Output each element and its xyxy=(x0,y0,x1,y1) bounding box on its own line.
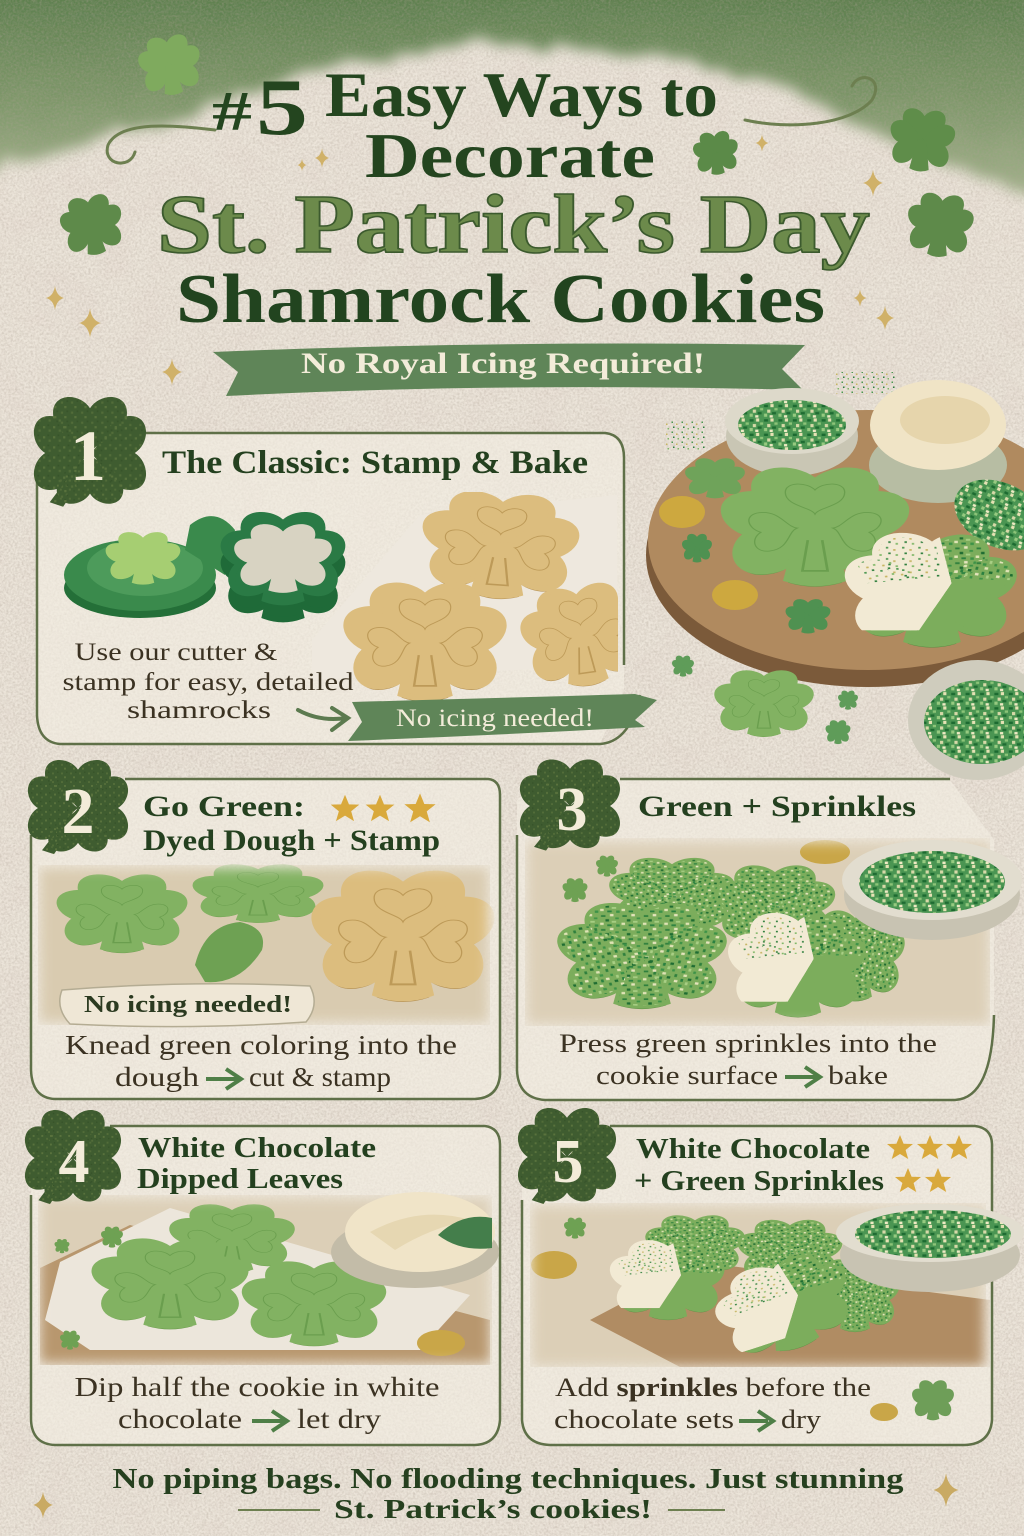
wood board xyxy=(590,1262,990,1367)
title line: Decorate: Decorate xyxy=(365,120,655,191)
number badge 2: 2 xyxy=(62,775,94,848)
no icing label: No icing needed! xyxy=(84,992,292,1018)
panel 3 caption: bake xyxy=(828,1061,888,1090)
panel 5 frame xyxy=(522,1126,992,1445)
panel 2 photo xyxy=(38,865,494,1025)
panel 4 caption xyxy=(74,1372,440,1434)
panel 5 sprinkle bowl xyxy=(836,1204,1024,1292)
stars xyxy=(887,1135,972,1192)
footer text xyxy=(112,1463,904,1524)
white chocolate bowl xyxy=(869,380,1007,503)
three stars xyxy=(331,793,436,822)
footer line one: No piping bags. No flooding techniques. Just stunning xyxy=(112,1463,904,1495)
number badge 1: 1 xyxy=(70,416,106,496)
tan cookies xyxy=(418,490,581,604)
title number five: 5 xyxy=(256,64,308,152)
panel 3 caption: Press green sprinkles into the xyxy=(559,1029,937,1058)
title xyxy=(157,59,870,338)
gold coin xyxy=(800,840,850,864)
panel 5 heading xyxy=(634,1133,884,1197)
gold coin xyxy=(531,1251,577,1279)
small table shamrocks xyxy=(672,656,858,744)
decorative coin and shamrock xyxy=(870,1380,955,1421)
gold coin xyxy=(417,1330,465,1356)
arrow xyxy=(739,1411,773,1431)
panel 2 frame xyxy=(31,779,500,1099)
number badge 4 xyxy=(25,1110,121,1204)
panel 4 heading: Dipped Leaves xyxy=(137,1163,343,1195)
panel 1 ribbon xyxy=(348,694,657,741)
panel 2 fill xyxy=(31,779,500,1099)
panel 2 heading xyxy=(143,790,440,857)
lower sprinkle bowl xyxy=(908,660,1024,780)
hero: wooden board with cookies xyxy=(646,372,1024,780)
wood and parchment xyxy=(40,1225,490,1365)
decorative shamrocks and sparkles in header xyxy=(46,32,977,385)
panel 5: White Chocolate + Green Sprinkles xyxy=(518,1108,1024,1445)
arrow xyxy=(206,1069,241,1089)
panel 1 fill xyxy=(37,433,624,744)
number badge 1 xyxy=(34,397,146,507)
panel 5 heading: White Chocolate xyxy=(636,1133,870,1165)
panel 3 caption: cookie surface xyxy=(596,1061,778,1090)
panel 4: White Chocolate Dipped Leaves xyxy=(25,1110,500,1445)
number badge 3 xyxy=(520,759,620,851)
panel 3 sprinkle bowl xyxy=(842,840,1022,940)
arrow xyxy=(252,1411,287,1431)
green header wash xyxy=(0,0,1024,205)
panel 5 heading: + Green Sprinkles xyxy=(634,1165,884,1197)
panel 2 caption xyxy=(65,1030,457,1092)
panel 5 caption: chocolate sets xyxy=(554,1405,734,1434)
number badge 4: 4 xyxy=(58,1128,90,1196)
parchment xyxy=(312,495,617,680)
wooden board xyxy=(646,410,1024,687)
panel 4 frame xyxy=(31,1126,500,1445)
title line: St. Patrick's Day: St. Patrick’s Day xyxy=(157,178,870,271)
panel 3 frame xyxy=(517,779,994,1100)
panel 5 caption: dry xyxy=(781,1405,821,1434)
panel 4 caption: chocolate xyxy=(118,1404,242,1434)
small cookies and coins xyxy=(659,458,831,633)
panel 1: The Classic xyxy=(34,397,657,744)
cutter xyxy=(222,515,344,620)
panel 1 caption: shamrocks xyxy=(127,697,271,724)
sprinkle bowl xyxy=(725,388,859,476)
stamp xyxy=(64,516,235,618)
panel 3 photo xyxy=(525,838,990,1026)
panel 1 frame xyxy=(37,433,640,744)
panel 3 caption xyxy=(559,1029,937,1090)
panel 3: Green + Sprinkles xyxy=(517,759,1022,1100)
panel 5 photo xyxy=(530,1203,990,1369)
footer line two: St. Patrick’s cookies! xyxy=(334,1494,652,1524)
panel 4 caption: let dry xyxy=(297,1404,382,1434)
title hash: # xyxy=(212,81,252,143)
panel 2 caption: cut & stamp xyxy=(249,1062,391,1092)
panel 1 ribbon: No icing needed! xyxy=(396,705,594,732)
number badge 5: 5 xyxy=(552,1128,584,1196)
title line: Shamrock Cookies: Shamrock Cookies xyxy=(176,261,825,338)
arrow xyxy=(785,1067,820,1087)
number badge 5 xyxy=(518,1108,616,1204)
scattered sprinkles on table xyxy=(665,372,895,450)
panel 3 fill xyxy=(517,780,994,1100)
panel 1 caption: stamp for easy, detailed xyxy=(62,669,354,696)
panel 4 heading xyxy=(137,1132,376,1195)
sprinkle spoon xyxy=(943,466,1024,564)
large green cookie xyxy=(721,470,909,587)
arrow xyxy=(298,708,348,730)
number badge 3: 3 xyxy=(556,776,588,844)
panel 4 fill xyxy=(31,1126,500,1445)
panel 4 caption: Dip half the cookie in white xyxy=(74,1372,440,1402)
panel 2 caption: Knead green coloring into the xyxy=(65,1030,457,1060)
panel 1 caption xyxy=(62,639,354,724)
panel 5 caption xyxy=(554,1373,871,1434)
number badge 2 xyxy=(28,760,128,854)
no icing label xyxy=(60,984,314,1027)
panel 5 fill xyxy=(522,1126,992,1445)
white chocolate bowl xyxy=(331,1192,499,1288)
panel 2 heading: Go Green: xyxy=(143,790,305,823)
panel 4 heading: White Chocolate xyxy=(138,1132,376,1164)
subtitle ribbon xyxy=(213,344,805,396)
decorative title flourishes xyxy=(107,78,876,163)
footer sparkles xyxy=(33,1473,959,1518)
cookie on table xyxy=(715,672,813,737)
panel 1 caption: Use our cutter & xyxy=(74,639,278,666)
panel 2 heading: Dyed Dough + Stamp xyxy=(143,824,440,857)
panel 3 heading: Green + Sprinkles xyxy=(638,790,916,823)
subtitle text: No Royal Icing Required! xyxy=(301,347,705,380)
panel 2 caption: dough xyxy=(115,1062,200,1092)
panel 2: Go Green xyxy=(28,760,500,1099)
panel 4 photo xyxy=(38,1195,492,1365)
panel 5 caption: Add sprinkles before the xyxy=(555,1373,871,1402)
panel 1 heading: The Classic: Stamp & Bake xyxy=(162,445,588,481)
dipped cookie xyxy=(848,537,1016,648)
title line: Easy Ways to: Easy Ways to xyxy=(325,59,718,130)
panel 1 photo xyxy=(64,490,648,702)
